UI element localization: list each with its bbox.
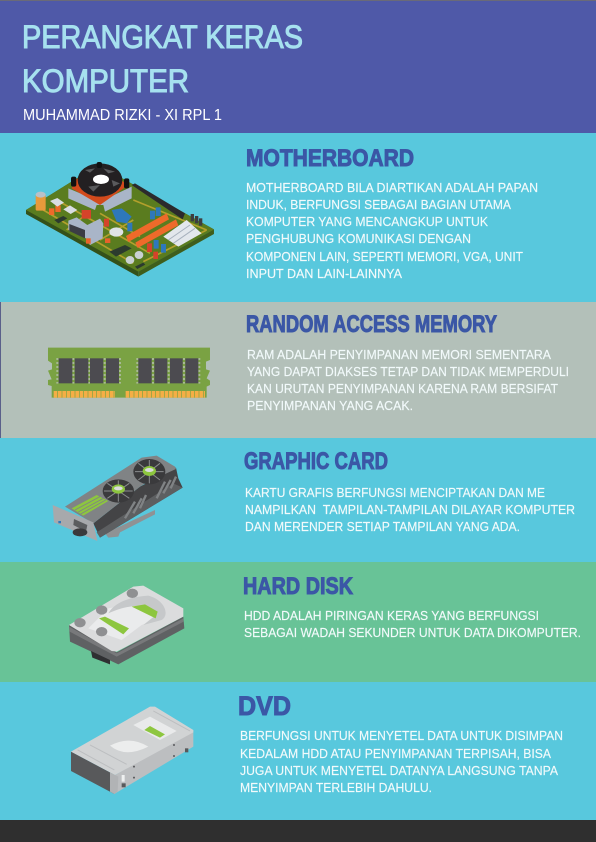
text: motherboard description: INDUK, BERFUNGSI SEBAGAI BAGIAN UTAMA	[246, 198, 512, 212]
title: PERANGKAT KERAS	[22, 19, 303, 55]
text: motherboard description	[246, 181, 538, 281]
text: hard disk description: SEBAGAI WADAH SEKUNDER UNTUK DATA DIKOMPUTER.	[244, 626, 581, 640]
heading: graphic card: GRAPHIC CARD	[244, 448, 388, 475]
text: dvd description: JUGA UNTUK MENYETEL DATANYA LANGSUNG TANPA	[240, 764, 559, 778]
text: RAM description: KAN URUTAN PENYIMPANAN KARENA RAM BERSIFAT	[247, 382, 558, 396]
text: motherboard description: INPUT DAN LAIN-LAINNYA	[246, 267, 403, 281]
panel: graphic card	[0, 438, 596, 562]
text: motherboard description: MOTHERBOARD BILA DIARTIKAN ADALAH PAPAN	[246, 181, 538, 195]
text: graphic card description: DAN MERENDER SETIAP TAMPILAN YANG ADA.	[245, 520, 520, 534]
panel: hard disk	[0, 562, 596, 682]
panel: dvd	[0, 682, 596, 820]
text: hard disk description	[244, 609, 581, 640]
panel: motherboard	[0, 133, 596, 302]
heading: motherboard: MOTHERBOARD	[246, 145, 414, 172]
icon: DVD drive	[71, 707, 193, 794]
text: RAM description	[247, 348, 569, 413]
panel: random access memory	[0, 302, 596, 438]
text: dvd description: MENYIMPAN TERLEBIH DAHULU.	[240, 781, 432, 795]
text: dvd description: BERFUNGSI UNTUK MENYETEL DATA UNTUK DISIMPAN	[240, 729, 563, 743]
text: RAM description: PENYIMPANAN YANG ACAK.	[247, 399, 413, 413]
icon: motherboard	[26, 162, 214, 277]
icon: hard disk	[69, 586, 184, 664]
text: dvd description	[240, 729, 563, 795]
text: graphic card description: NAMPILKAN TAMPILAN-TAMPILAN DILAYAR KOMPUTER	[245, 503, 575, 517]
text: hard disk description: HDD ADALAH PIRINGAN KERAS YANG BERFUNGSI	[244, 609, 539, 623]
text: RAM description: YANG DAPAT DIAKSES TETAP DAN TIDAK MEMPERDULI	[247, 365, 569, 379]
text: RAM description: RAM ADALAH PENYIMPANAN MEMORI SEMENTARA	[247, 348, 552, 362]
text: motherboard description: PENGHUBUNG KOMUNIKASI DENGAN	[246, 232, 471, 246]
footer band	[0, 820, 596, 842]
author line: MUHAMMAD RIZKI - XI RPL 1	[23, 107, 222, 124]
text: graphic card description: KARTU GRAFIS BERFUNGSI MENCIPTAKAN DAN ME	[245, 486, 545, 500]
text: motherboard description: KOMPUTER YANG MENCANGKUP UNTUK	[246, 215, 489, 229]
icon: RAM module	[48, 348, 210, 398]
heading: hard disk: HARD DISK	[243, 573, 354, 600]
heading: random access memory: RANDOM ACCESS MEMORY	[246, 311, 497, 338]
icon: graphics card	[53, 456, 183, 541]
heading: dvd: DVD	[238, 691, 291, 721]
text: dvd description: KEDALAM HDD ATAU PENYIMPANAN TERPISAH, BISA	[240, 747, 552, 761]
title	[22, 19, 303, 99]
text: graphic card description	[245, 486, 575, 534]
panel: header	[0, 0, 596, 133]
text: motherboard description: KOMPONEN LAIN, SEPERTI MEMORI, VGA, UNIT	[246, 250, 523, 264]
title: KOMPUTER	[22, 63, 189, 99]
